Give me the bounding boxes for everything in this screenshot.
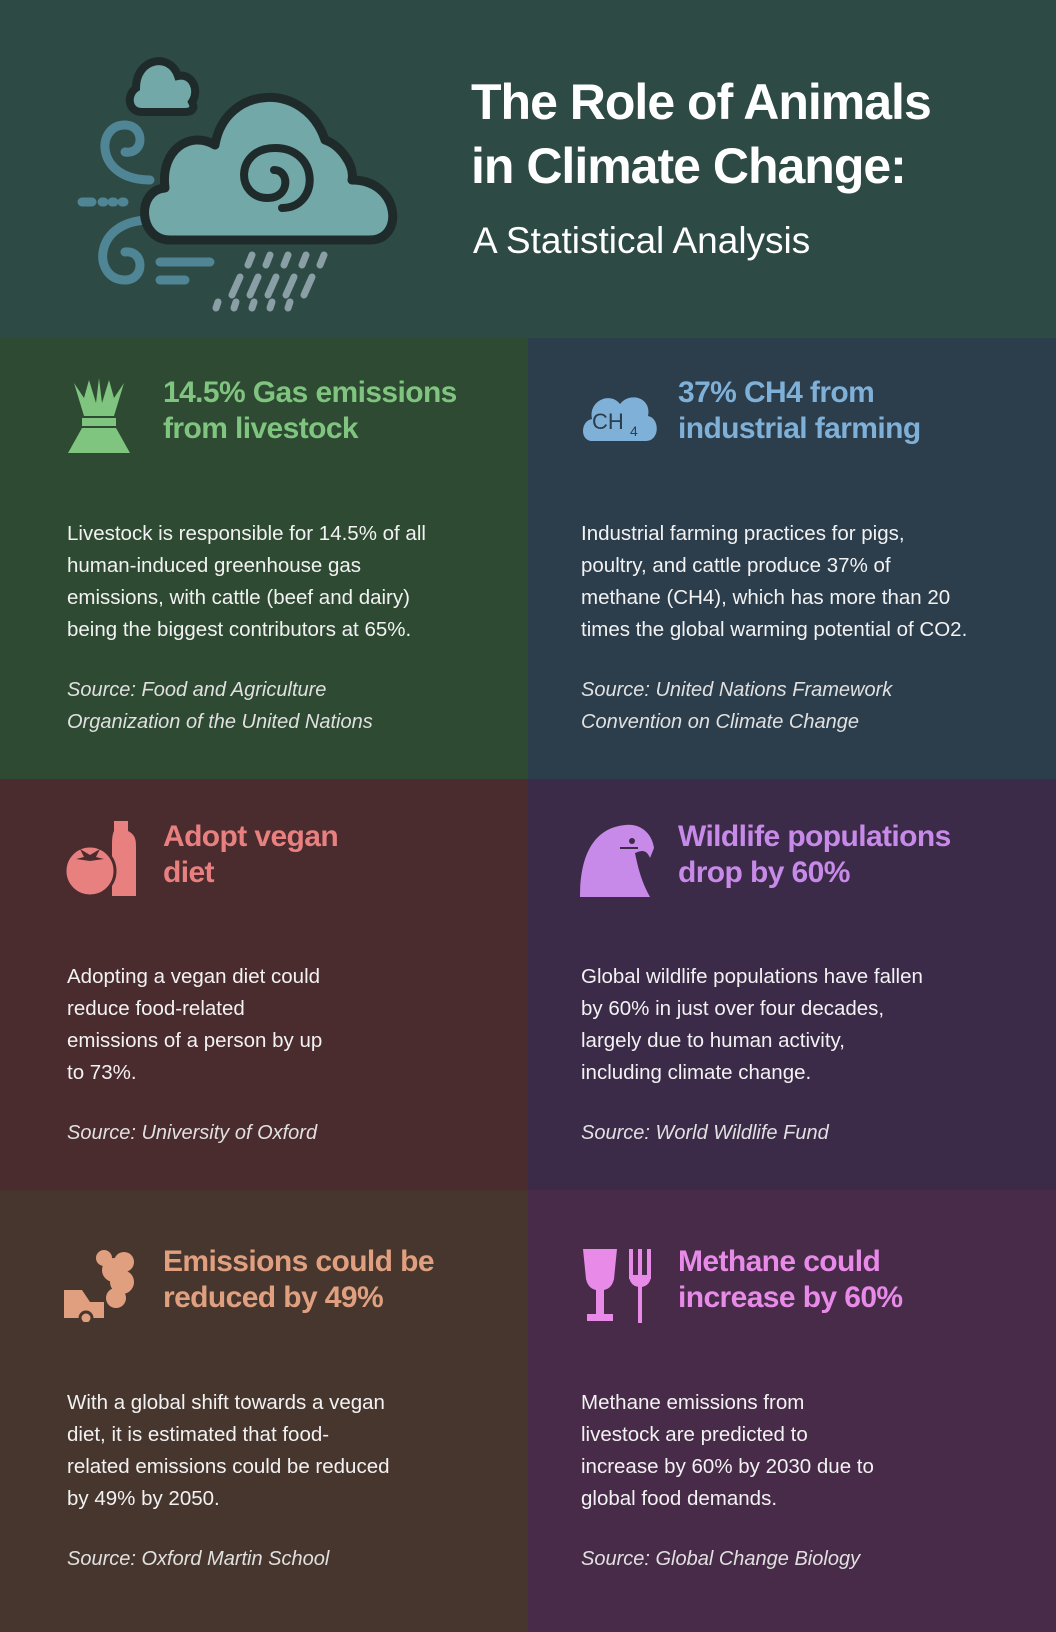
heading: reduced by 49% bbox=[163, 1281, 383, 1314]
body text bbox=[581, 965, 923, 1084]
body text: With a global shift towards a vegan bbox=[67, 1391, 385, 1414]
icon: CH4 cloud bbox=[583, 397, 657, 441]
heading bbox=[678, 820, 951, 889]
body text: livestock are predicted to bbox=[581, 1423, 808, 1446]
heading: diet bbox=[163, 856, 214, 889]
body text: including climate change. bbox=[581, 1061, 811, 1084]
source: Source: Food and Agriculture bbox=[67, 679, 326, 701]
panel: methane increase bbox=[528, 1190, 1056, 1632]
panel: CH4 bbox=[528, 338, 1056, 779]
body text: poultry, and cattle produce 37% of bbox=[581, 554, 891, 577]
icon: CH4 cloud: CH bbox=[592, 409, 624, 434]
body text: being the biggest contributors at 65%. bbox=[67, 618, 411, 641]
source bbox=[581, 679, 893, 733]
heading bbox=[163, 1245, 434, 1314]
body text: by 49% by 2050. bbox=[67, 1487, 220, 1510]
body text: largely due to human activity, bbox=[581, 1029, 845, 1052]
icon: wheat bundle bbox=[68, 378, 130, 453]
body text: related emissions could be reduced bbox=[67, 1455, 390, 1478]
body text bbox=[581, 522, 967, 641]
source bbox=[67, 679, 373, 733]
subtitle: A Statistical Analysis bbox=[473, 220, 810, 261]
icon: glass and fork bbox=[583, 1249, 651, 1323]
icon: cloud with wind and rain bbox=[78, 57, 398, 312]
icon: CH4 cloud: 4 bbox=[630, 423, 638, 439]
body text: Industrial farming practices for pigs, bbox=[581, 522, 905, 545]
body text bbox=[67, 1391, 390, 1510]
panel: vegan bbox=[0, 779, 528, 1190]
body text: to 73%. bbox=[67, 1061, 137, 1084]
title: The Role of Animals bbox=[471, 74, 931, 130]
heading: increase by 60% bbox=[678, 1281, 902, 1314]
body text: methane (CH4), which has more than 20 bbox=[581, 586, 950, 609]
body text bbox=[581, 1391, 874, 1510]
source: Source: University of Oxford bbox=[67, 1122, 317, 1144]
source: Organization of the United Nations bbox=[67, 711, 373, 733]
heading: Methane could bbox=[678, 1245, 880, 1278]
panel: emissions reduced bbox=[0, 1190, 528, 1632]
source: Source: Oxford Martin School bbox=[67, 1548, 329, 1570]
body text: diet, it is estimated that food- bbox=[67, 1423, 329, 1446]
heading bbox=[163, 376, 457, 445]
source: Source: World Wildlife Fund bbox=[581, 1122, 829, 1144]
panel: wildlife bbox=[528, 779, 1056, 1190]
icon: tomato and bottle bbox=[66, 821, 136, 896]
body text: global food demands. bbox=[581, 1487, 777, 1510]
heading bbox=[678, 376, 921, 445]
heading: Emissions could be bbox=[163, 1245, 434, 1278]
panel: livestock bbox=[0, 338, 528, 779]
heading: industrial farming bbox=[678, 412, 921, 445]
body text bbox=[67, 965, 322, 1084]
heading: drop by 60% bbox=[678, 856, 850, 889]
body text: increase by 60% by 2030 due to bbox=[581, 1455, 874, 1478]
heading bbox=[678, 1245, 902, 1314]
heading: Wildlife populations bbox=[678, 820, 951, 853]
heading: Adopt vegan bbox=[163, 820, 338, 853]
body text: by 60% in just over four decades, bbox=[581, 997, 884, 1020]
body text: times the global warming potential of CO2. bbox=[581, 618, 967, 641]
body text: Adopting a vegan diet could bbox=[67, 965, 320, 988]
icon: car with smoke bbox=[64, 1250, 134, 1322]
body text: emissions, with cattle (beef and dairy) bbox=[67, 586, 410, 609]
body text: emissions of a person by up bbox=[67, 1029, 322, 1052]
header bbox=[0, 0, 1056, 338]
body text: Global wildlife populations have fallen bbox=[581, 965, 923, 988]
body text: human-induced greenhouse gas bbox=[67, 554, 361, 577]
body text: reduce food-related bbox=[67, 997, 245, 1020]
heading: 37% CH4 from bbox=[678, 376, 874, 409]
title: in Climate Change: bbox=[471, 138, 906, 194]
body text bbox=[67, 522, 426, 641]
source: Convention on Climate Change bbox=[581, 711, 859, 733]
heading: 14.5% Gas emissions bbox=[163, 376, 457, 409]
source: Source: United Nations Framework bbox=[581, 679, 892, 701]
icon: eagle head bbox=[580, 824, 654, 897]
body text: Methane emissions from bbox=[581, 1391, 804, 1414]
body text: Livestock is responsible for 14.5% of all bbox=[67, 522, 426, 545]
source: Source: Global Change Biology bbox=[581, 1548, 860, 1570]
heading: from livestock bbox=[163, 412, 358, 445]
heading bbox=[163, 820, 338, 889]
title bbox=[471, 74, 931, 194]
